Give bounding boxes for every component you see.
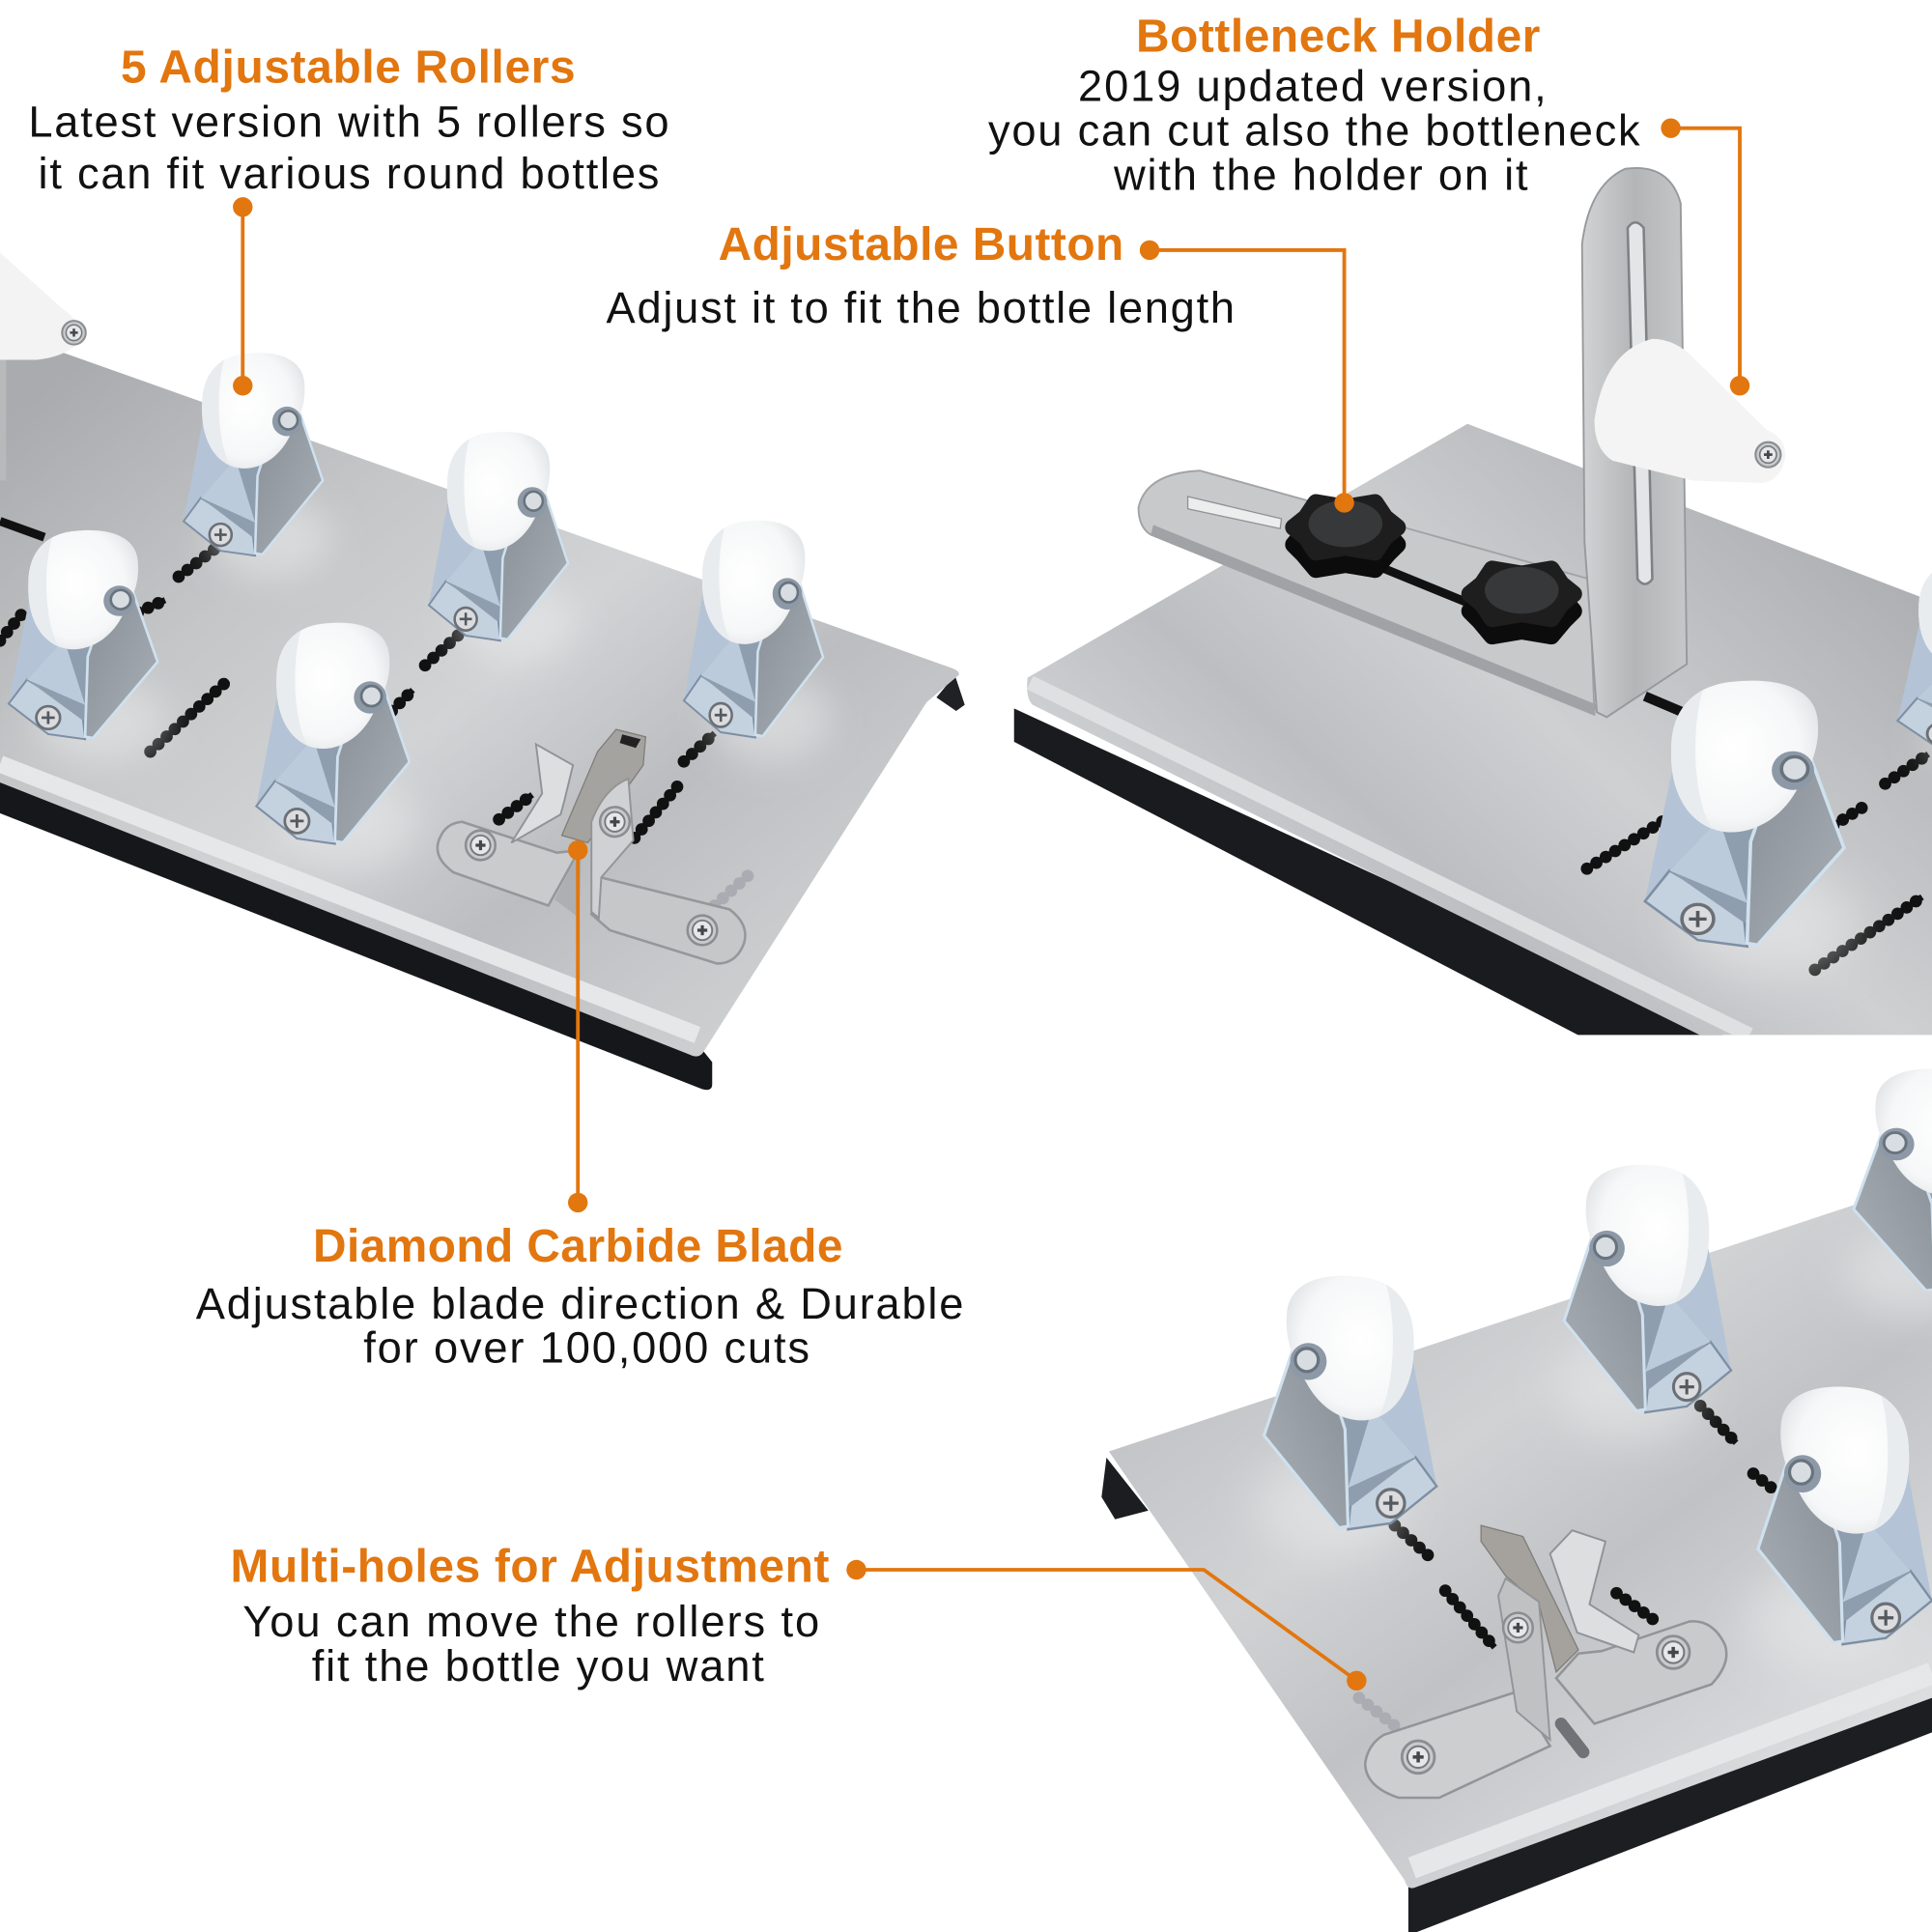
front bend highlight xyxy=(0,764,697,1035)
callout: Multi-holes for Adjustment xyxy=(231,1542,1367,1690)
leader line xyxy=(233,197,252,395)
description: Latest version with 5 rollers so xyxy=(28,98,669,147)
left tab xyxy=(1365,1691,1550,1798)
roller 5 xyxy=(256,623,419,869)
slots xyxy=(1359,1406,1776,1752)
black rubber base strip xyxy=(1408,1695,1932,1932)
bottle cone and upright stub xyxy=(0,252,86,480)
description: 2019 updated version, xyxy=(1078,62,1547,111)
leader line xyxy=(568,840,587,1212)
wing nut xyxy=(511,744,573,842)
callout: Bottleneck Holder xyxy=(988,12,1749,395)
heading: Adjustable Button xyxy=(719,219,1123,270)
panel: bottom-right product view with multi-holes xyxy=(1101,1068,1932,1932)
adjuster arm xyxy=(1139,470,1597,715)
right end lip xyxy=(936,675,965,711)
leader line xyxy=(1661,118,1749,395)
panel: top-left product view with rollers and blade xyxy=(0,252,965,1090)
blade xyxy=(1481,1525,1578,1672)
heading: Bottleneck Holder xyxy=(1136,12,1540,63)
description xyxy=(28,98,669,198)
description xyxy=(196,1279,963,1373)
knob 2 xyxy=(1470,567,1574,636)
upright xyxy=(1498,1578,1550,1740)
description: Adjust it to fit the bottle length xyxy=(607,283,1235,332)
right tab xyxy=(591,877,745,963)
edge roller xyxy=(1897,557,1932,777)
leader line xyxy=(1140,241,1354,513)
large roller xyxy=(1645,681,1857,978)
vertical bottleneck plate xyxy=(1582,168,1687,717)
description: You can move the rollers to xyxy=(242,1597,819,1646)
description: you can cut also the bottleneck xyxy=(988,106,1640,156)
description: Adjustable blade direction & Durable xyxy=(196,1279,963,1328)
cutter blade assembly xyxy=(438,729,745,963)
description: it can fit various round bottles xyxy=(39,149,659,198)
upright xyxy=(591,779,634,918)
knob 1 xyxy=(1293,500,1397,569)
wing nut xyxy=(1550,1530,1638,1652)
inner upright xyxy=(554,846,582,918)
roller D xyxy=(1843,1068,1932,1318)
roller A xyxy=(1253,1276,1436,1559)
steel plate xyxy=(1027,424,1932,1060)
callout: Diamond Carbide Blade xyxy=(196,840,963,1373)
description xyxy=(242,1597,819,1690)
cutter blade assembly xyxy=(1365,1525,1726,1798)
description: for over 100,000 cuts xyxy=(363,1323,810,1373)
black textured base strip xyxy=(1014,708,1749,1047)
leader line xyxy=(846,1560,1367,1690)
description: with the holder on it xyxy=(1113,150,1528,199)
callout: Adjustable Button xyxy=(607,219,1354,513)
roller 1 xyxy=(184,353,331,579)
roller B xyxy=(1553,1165,1731,1441)
blade xyxy=(562,729,645,842)
callout: 5 Adjustable Rollers xyxy=(28,42,669,395)
heading: 5 Adjustable Rollers xyxy=(121,42,576,93)
right tab xyxy=(1556,1621,1726,1723)
roller 2 xyxy=(429,432,577,665)
roller 4 xyxy=(9,530,167,763)
heading: Diamond Carbide Blade xyxy=(313,1221,842,1272)
description xyxy=(988,62,1640,199)
heading: Multi-holes for Adjustment xyxy=(231,1542,829,1593)
left end lip xyxy=(1101,1458,1149,1520)
left tab xyxy=(438,822,579,906)
black rubber base strip xyxy=(0,774,712,1090)
bottleneck cone xyxy=(1595,339,1785,483)
steel plate xyxy=(0,330,959,1057)
front bend highlight xyxy=(1412,1673,1932,1868)
slots xyxy=(0,522,752,906)
roller 3 xyxy=(684,521,832,762)
steel plate xyxy=(1109,1179,1932,1889)
slots xyxy=(1587,696,1928,970)
panel: top-right product view with bottleneck holder xyxy=(1014,168,1932,1060)
description: fit the bottle you want xyxy=(312,1641,764,1690)
front bend highlight xyxy=(1030,683,1749,1035)
roller C xyxy=(1747,1386,1932,1674)
